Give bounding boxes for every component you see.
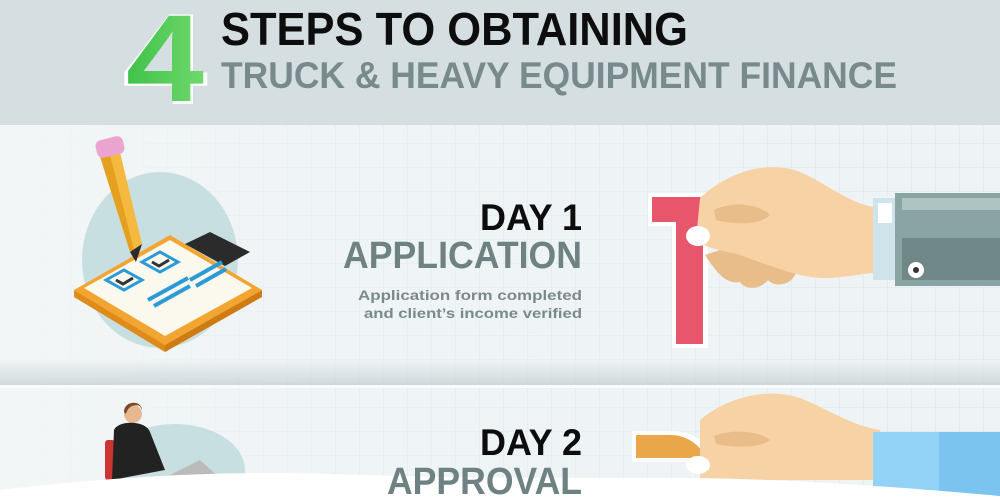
step 1 text [343,197,582,321]
title: TRUCK & HEAVY EQUIPMENT FINANCE [221,55,897,96]
title [221,3,897,96]
header band [0,0,1000,125]
step 2 text [387,422,582,500]
hand holding number 1 [648,167,1000,348]
title: STEPS TO OBTAINING [221,3,688,55]
hand holding number 2 [632,394,1000,500]
background grid [0,125,1000,500]
icon: clipboard with pencil [74,135,262,352]
step 2 text: DAY 2 [480,422,582,463]
step 1 text: and client’s income verified [364,305,582,321]
step 1 text: DAY 1 [480,197,582,238]
icon: businessman at laptop [105,403,245,500]
bottom white wave [0,473,1000,500]
step 1 text: APPLICATION [343,235,582,277]
step 1 text: Application form completed [358,287,582,303]
